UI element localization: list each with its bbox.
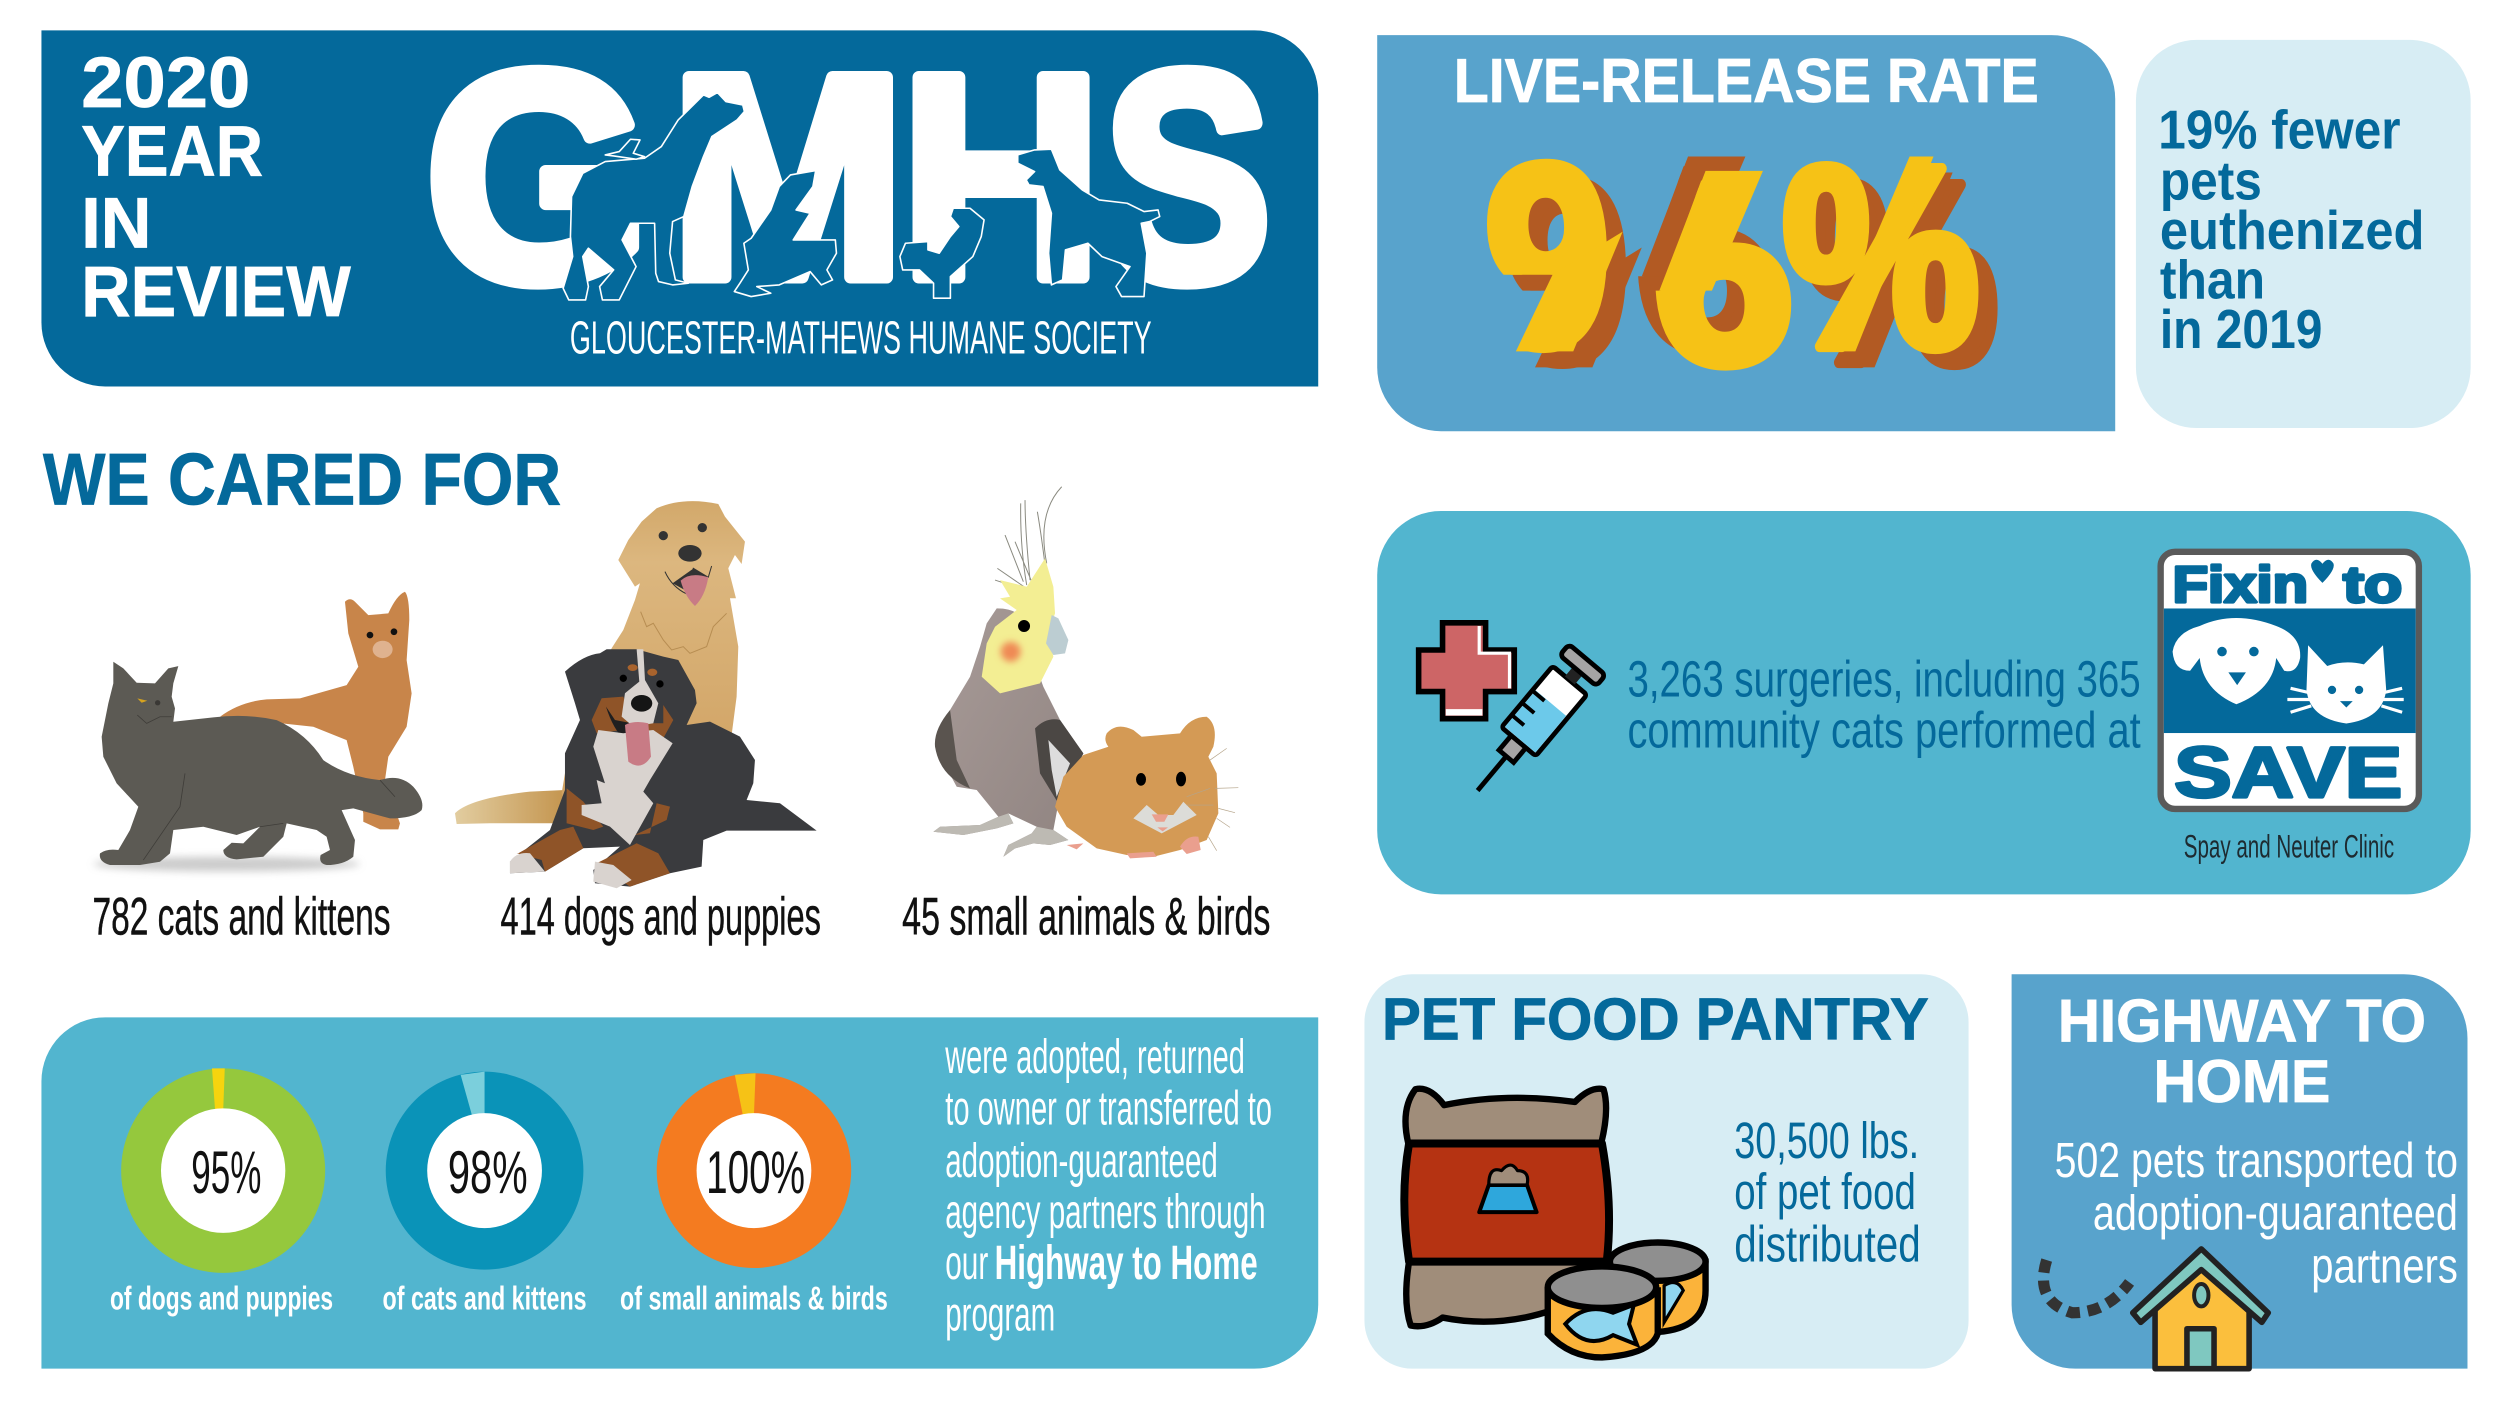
text: pets transported — [2055, 1133, 2458, 1293]
illustration: bird and hamster — [933, 487, 1238, 858]
big number: 96% shadow: % — [1801, 130, 1999, 418]
icon: dashed road — [2043, 1260, 2130, 1313]
heading: we cared for: WE CARED FOR — [43, 439, 561, 521]
text: adoption description: were adopted, returned — [945, 1031, 1245, 1084]
text: adoption description: agency partners through — [945, 1186, 1266, 1239]
big number: 96%: 9 — [1484, 111, 1610, 400]
text: 19% fewer pets euthenized: than — [2160, 251, 2265, 311]
text: adoption description: adoption-guaranteed — [945, 1135, 1218, 1188]
text: adoption description: Highway to Home — [995, 1237, 1258, 1290]
panel: adoption outcomes — [41, 1017, 1318, 1369]
logo dog face — [2173, 618, 2300, 704]
caption: dogs and puppies: 414 dogs and puppies — [501, 887, 821, 946]
panel: live-release rate — [1377, 35, 2115, 431]
text: surgeries count: community cats performed at — [1627, 701, 2141, 758]
donut chart: dogs 95% — [121, 1068, 325, 1273]
text: adoption description: to owner or transferred to — [945, 1082, 1272, 1135]
title: 2020 year in review: REVIEW — [81, 252, 351, 332]
donut chart: dogs 95%: 95% — [191, 1138, 261, 1206]
donut labels: of small animals & birds — [620, 1281, 888, 1318]
donut chart: cats 98% — [386, 1072, 583, 1270]
big number: 96% — [1486, 156, 1978, 371]
icon: pet food bag — [1404, 1089, 1609, 1326]
big number: 96% shadow: 9 — [1503, 127, 1629, 416]
text: 19% fewer pets euthenized: euthenized — [2160, 201, 2424, 261]
icon: medical cross — [1419, 623, 1514, 719]
text: surgeries count — [1627, 650, 2141, 758]
icon: syringe — [1459, 644, 1606, 806]
icon: house — [2133, 1249, 2268, 1369]
icon: cans — [1548, 1243, 1706, 1357]
text: 19% fewer pets euthenized: in 2019 — [2160, 300, 2322, 360]
logo wordmark GMHS: H — [900, 15, 1102, 339]
logo: fixin to save — [2161, 552, 2419, 813]
heading: highway to home: HOME — [2153, 1047, 2330, 1115]
logo wordmark GMHS: S — [1103, 10, 1271, 344]
heading: live-release rate: LIVE-RELEASE RATE — [1454, 47, 2039, 116]
heading: pet food pantry: PET FOOD PANTRY — [1382, 987, 1929, 1053]
logo: fixin to save: to — [2343, 556, 2402, 613]
donut labels: of cats and kittens — [383, 1281, 587, 1318]
text: adoption description: our — [945, 1237, 988, 1290]
big number: 96%: 6 — [1651, 128, 1795, 418]
logo: fixin to save: SAVE — [2174, 733, 2402, 813]
title: 2020 year in review: IN — [81, 183, 151, 264]
illustration: dogs — [455, 501, 817, 888]
logo wordmark GMHS: G — [425, 10, 651, 344]
text: 19% fewer pets euthenized: 19% fewer — [2158, 100, 2401, 161]
title: 2020 year in review: 2020 — [81, 43, 250, 123]
big number: 96% shadow — [1512, 156, 1998, 370]
logo wordmark GMHS — [425, 10, 1271, 344]
text: 19% fewer pets euthenized: pets — [2160, 152, 2262, 212]
heading: highway to home — [2058, 986, 2426, 1115]
text: pounds distributed: distributed — [1734, 1216, 1921, 1273]
caption: small animals and birds: 45 small animals & birds — [902, 887, 1270, 946]
logo subtitle: GLOUCESTER-MATHEWS HUMANE SOCIETY — [570, 312, 1152, 364]
panel: header — [41, 10, 1318, 386]
panel: fewer euthanized — [2136, 40, 2471, 428]
big number: 96% shadow: 6 — [1634, 114, 1777, 403]
panel: surgeries — [1377, 511, 2471, 894]
text: pets transported: partners — [2311, 1238, 2458, 1293]
panel: pet food pantry — [1364, 974, 1969, 1369]
heading: highway to home: HIGHWAY TO — [2058, 986, 2426, 1054]
big number: 96%: % — [1782, 114, 1980, 402]
donut labels — [110, 1281, 888, 1318]
logo wordmark GMHS: M — [670, 15, 906, 339]
title: 2020 year in review: YEAR — [81, 112, 263, 192]
text: adoption description — [945, 1031, 1272, 1341]
donut chart: cats 98%: 98% — [448, 1138, 528, 1206]
logo cat face — [2287, 645, 2404, 723]
logo silhouettes: animals — [563, 93, 1160, 300]
panel: highway to home — [2012, 974, 2467, 1369]
text: pounds distributed — [1734, 1112, 1921, 1273]
illustration: cats — [93, 592, 422, 871]
text: 19% fewer pets euthenized — [2158, 100, 2424, 360]
text: adoption description: program — [945, 1288, 1055, 1341]
donut labels: of dogs and puppies — [110, 1281, 333, 1318]
logo caption: Spay and Neuter Clinic — [2184, 829, 2394, 865]
donut chart: small animals 100% — [657, 1073, 851, 1268]
title: 2020 year in review — [81, 43, 351, 332]
caption: cats and kittens: 782 cats and kittens — [92, 887, 391, 946]
text: pounds distributed: 30,500 lbs. — [1734, 1112, 1919, 1169]
text: pounds distributed: of pet food — [1734, 1163, 1916, 1220]
logo: fixin to save: Fixin — [2173, 556, 2308, 613]
donut chart: small animals 100%: 100% — [706, 1138, 805, 1206]
text: surgeries count: 3,263 surgeries, including 365 — [1627, 650, 2141, 707]
